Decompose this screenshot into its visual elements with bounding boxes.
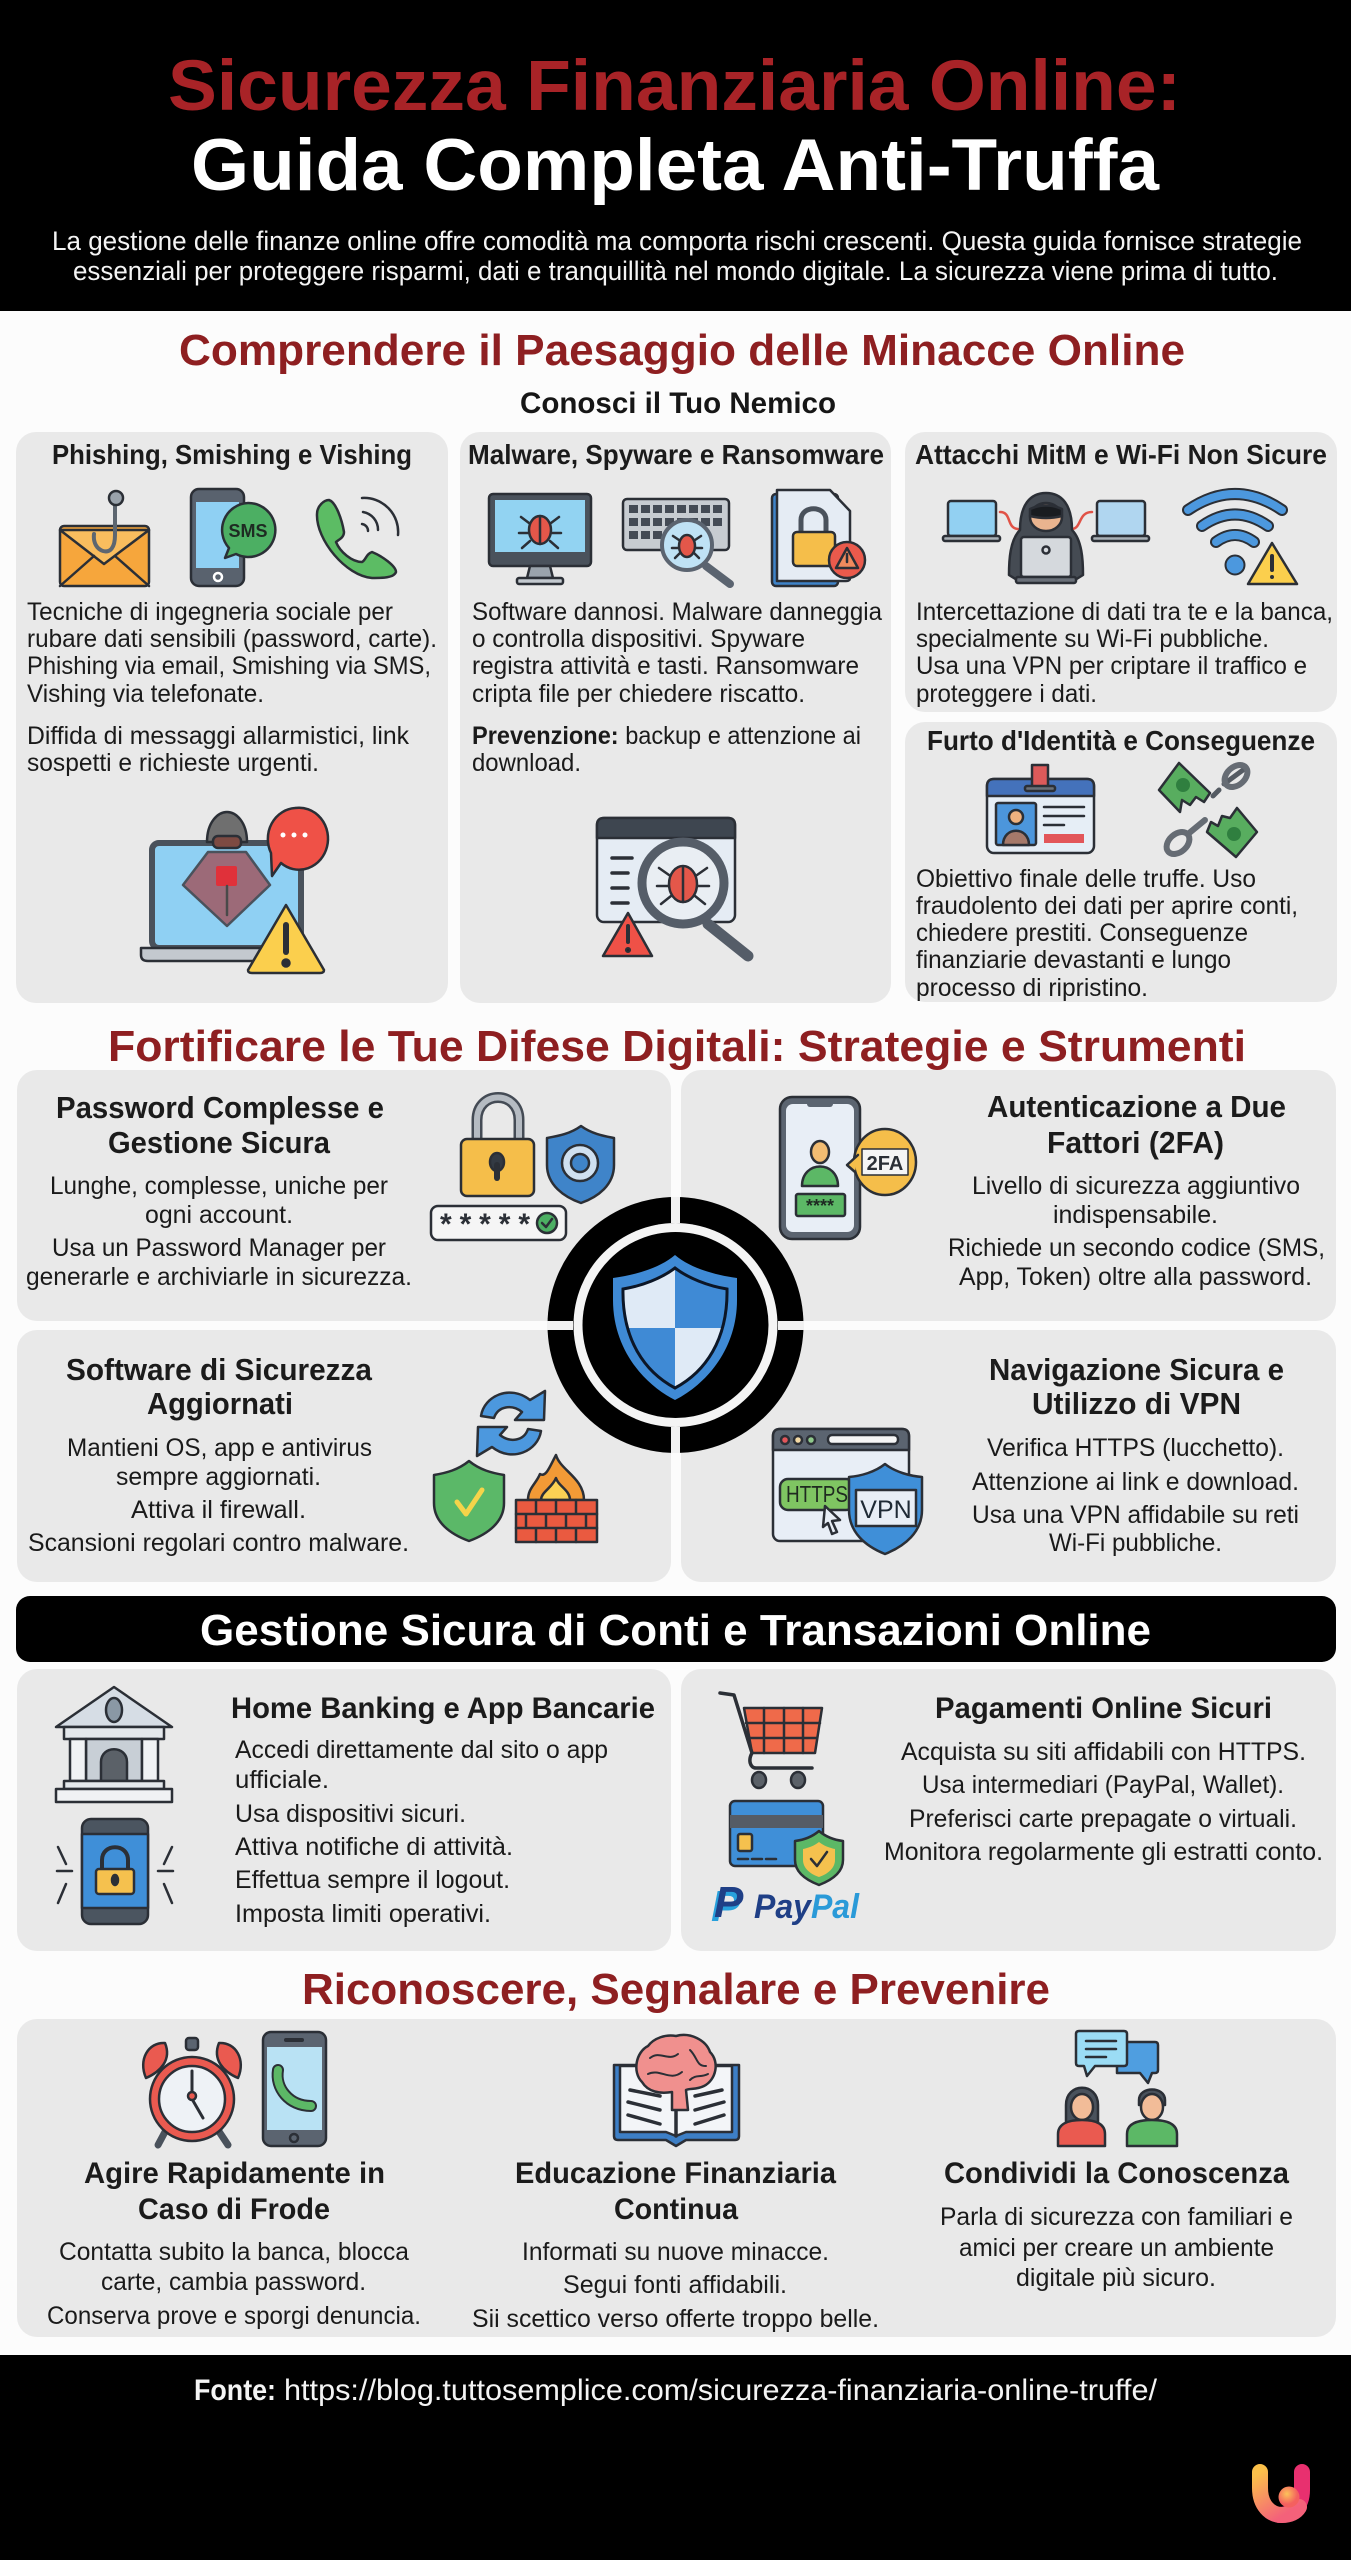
card title: Continua bbox=[614, 2193, 738, 2226]
panel: security software bbox=[17, 1330, 671, 1582]
card text: Conserva prove e sporgi denuncia. bbox=[47, 2302, 421, 2330]
icon: hacker laptop bbox=[141, 808, 328, 973]
text block: rubare dati sensibili (password, carte). bbox=[27, 625, 437, 653]
card text: Imposta limiti operativi. bbox=[235, 1900, 491, 1928]
icon: browser HTTPS and VPN: VPN bbox=[860, 1496, 912, 1524]
icon: padlock and shield bbox=[431, 1098, 614, 1241]
card text: Acquista su siti affidabili con HTTPS. bbox=[901, 1738, 1306, 1766]
card text: carte, cambia password. bbox=[101, 2268, 366, 2296]
logo: PayPal bbox=[711, 1878, 860, 1931]
panel title: Malware, Spyware e Ransomware bbox=[468, 439, 884, 470]
card title: Home Banking e App Bancarie bbox=[231, 1692, 655, 1725]
text block: Tecniche di ingegneria sociale per bbox=[27, 598, 393, 626]
section heading: threats: Comprendere il Paesaggio delle Minacce Online bbox=[179, 326, 1185, 375]
card text bbox=[47, 2238, 421, 2330]
panel title: Furto d'Identità e Conseguenze bbox=[927, 725, 1315, 756]
logo bbox=[1260, 2472, 1302, 2515]
text block: proteggere i dati. bbox=[916, 680, 1097, 708]
icon: browser scan bbox=[597, 818, 748, 956]
text block: Phishing via email, Smishing via SMS, bbox=[27, 652, 431, 680]
footer band bbox=[0, 2355, 1351, 2560]
panel title: Phishing, Smishing e Vishing bbox=[52, 439, 412, 470]
icon: phone call bbox=[317, 498, 398, 578]
card text: Attiva notifiche di attività. bbox=[235, 1833, 513, 1861]
card text: Richiede un secondo codice (SMS, bbox=[948, 1234, 1325, 1262]
source line: Fonte: bbox=[194, 2374, 276, 2407]
icon: phone 2FA: 2FA bbox=[867, 1153, 903, 1175]
text block: Usa una VPN per criptare il traffico e bbox=[916, 652, 1307, 680]
card text: Usa dispositivi sicuri. bbox=[235, 1800, 466, 1828]
text block: Vishing via telefonate. bbox=[27, 680, 264, 708]
card title: Gestione Sicura bbox=[108, 1125, 331, 1160]
logo: PayPal: PayPal bbox=[754, 1888, 860, 1926]
panel title: Attacchi MitM e Wi-Fi Non Sicure bbox=[915, 439, 1327, 470]
icon: padlock and shield: ***** bbox=[440, 1208, 530, 1241]
icon: phone sms bbox=[191, 489, 275, 586]
text block: o controlla dispositivi. Spyware bbox=[472, 625, 805, 653]
text block: fraudolento dei dati per aprire conti, bbox=[916, 892, 1298, 920]
icon: chat and people bbox=[1058, 2031, 1177, 2146]
icon: email hook bbox=[60, 491, 149, 586]
card title bbox=[56, 1090, 384, 1160]
title line 2: Guida Completa Anti-Truffa bbox=[191, 125, 1160, 206]
panel: online payments bbox=[681, 1669, 1336, 1951]
icon: phone 2FA bbox=[780, 1097, 916, 1239]
center shield badge bbox=[547, 1197, 804, 1453]
card title bbox=[84, 2157, 385, 2226]
card title: Condividi la Conoscenza bbox=[944, 2157, 1289, 2190]
text block: finanziarie devastanti e lungo bbox=[916, 946, 1231, 974]
card text: Attenzione ai link e download. bbox=[972, 1468, 1299, 1496]
card text: Usa intermediari (PayPal, Wallet). bbox=[922, 1771, 1284, 1799]
card text: Wi-Fi pubbliche. bbox=[1049, 1529, 1222, 1557]
text block: sospetti e richieste urgenti. bbox=[27, 749, 319, 777]
card text: digitale più sicuro. bbox=[1016, 2264, 1216, 2292]
card text: Contatta subito la banca, blocca bbox=[59, 2238, 409, 2266]
section heading: recognize: Riconoscere, Segnalare e Prevenire bbox=[302, 1965, 1050, 2014]
icon: phone sms: SMS bbox=[228, 521, 268, 541]
panel: MitM bbox=[905, 432, 1337, 712]
card title: Aggiornati bbox=[147, 1386, 293, 1421]
panel: safe navigation bbox=[681, 1330, 1336, 1582]
icon: credit card bbox=[730, 1801, 843, 1885]
section banner: accounts and transactions: Gestione Sicura di Conti e Transazioni Online bbox=[200, 1606, 1151, 1655]
panel: malware bbox=[460, 432, 891, 1003]
panel: passwords bbox=[17, 1070, 671, 1321]
subheading: Conosci il Tuo Nemico bbox=[520, 387, 836, 420]
card text bbox=[940, 2203, 1293, 2292]
header band bbox=[0, 0, 1351, 311]
text block: specialmente su Wi-Fi pubbliche. bbox=[916, 625, 1269, 653]
card text: Parla di sicurezza con familiari e bbox=[940, 2203, 1293, 2231]
card title: Pagamenti Online Sicuri bbox=[935, 1692, 1272, 1725]
card text: Usa un Password Manager per bbox=[52, 1234, 386, 1262]
card text: Verifica HTTPS (lucchetto). bbox=[987, 1434, 1284, 1462]
card text bbox=[948, 1172, 1325, 1291]
logo: PayPal: P bbox=[711, 1882, 741, 1931]
logo: PayPal: P bbox=[714, 1878, 744, 1927]
card title: Caso di Frode bbox=[138, 2193, 330, 2226]
panel: home banking bbox=[17, 1669, 671, 1951]
card text: Segui fonti affidabili. bbox=[563, 2271, 787, 2299]
card text: Mantieni OS, app e antivirus bbox=[67, 1434, 372, 1462]
card text: ogni account. bbox=[145, 1201, 293, 1229]
icon: monitor bug bbox=[489, 494, 591, 584]
card text bbox=[235, 1736, 608, 1928]
card text: amici per creare un ambiente bbox=[959, 2234, 1274, 2262]
panel: recognize report prevent bbox=[17, 2019, 1336, 2337]
text block: cripta file per chiedere riscatto. bbox=[472, 680, 805, 708]
text block: Obiettivo finale delle truffe. Uso bbox=[916, 865, 1256, 893]
card title: Autenticazione a Due bbox=[987, 1089, 1286, 1124]
card text: ufficiale. bbox=[235, 1766, 329, 1794]
icon: sync arrows bbox=[477, 1391, 545, 1456]
icon: locked file bbox=[772, 490, 865, 586]
icon: book and brain bbox=[614, 2035, 739, 2146]
card text bbox=[884, 1738, 1323, 1866]
icon: green shield bbox=[434, 1461, 504, 1541]
text block bbox=[27, 598, 437, 777]
icon: ID card bbox=[987, 765, 1094, 853]
icon: phone 2FA: **** bbox=[806, 1196, 834, 1216]
card text: Attiva il firewall. bbox=[131, 1496, 306, 1524]
text block bbox=[472, 598, 882, 777]
text block bbox=[916, 598, 1333, 708]
text block: download. bbox=[472, 749, 581, 777]
card text: sempre aggiornati. bbox=[116, 1463, 321, 1491]
icon: browser HTTPS and VPN: HTTPS bbox=[786, 1481, 848, 1507]
card text bbox=[472, 2238, 879, 2333]
card text bbox=[26, 1172, 412, 1291]
text block bbox=[916, 865, 1298, 1002]
card title bbox=[989, 1352, 1284, 1421]
card text: Sii scettico verso offerte troppo belle. bbox=[472, 2305, 879, 2333]
icon: keyboard magnifier bbox=[623, 499, 730, 584]
card text bbox=[972, 1434, 1299, 1557]
card title: Navigazione Sicura e bbox=[989, 1352, 1284, 1387]
card title bbox=[987, 1089, 1286, 1160]
text block: registra attività e tasti. Ransomware bbox=[472, 652, 859, 680]
card title: Password Complesse e bbox=[56, 1090, 384, 1125]
text block: chiedere prestiti. Conseguenze bbox=[916, 919, 1248, 947]
card text: Scansioni regolari contro malware. bbox=[28, 1529, 409, 1557]
text block: processo di ripristino. bbox=[916, 974, 1148, 1002]
card text: Lunghe, complesse, uniche per bbox=[50, 1172, 388, 1200]
card text: generarle e archiviarle in sicurezza. bbox=[26, 1263, 412, 1291]
card text: indispensabile. bbox=[1053, 1201, 1218, 1229]
card title: Fattori (2FA) bbox=[1047, 1125, 1224, 1160]
text block: Software dannosi. Malware danneggia bbox=[472, 598, 882, 626]
card title: Software di Sicurezza bbox=[66, 1352, 373, 1387]
panel: phishing bbox=[16, 432, 448, 1003]
card text: App, Token) oltre alla password. bbox=[959, 1263, 1312, 1291]
card text: Livello di sicurezza aggiuntivo bbox=[972, 1172, 1300, 1200]
text block: Diffida di messaggi allarmistici, link bbox=[27, 722, 409, 750]
icon: wifi warning bbox=[1188, 494, 1297, 584]
intro text: La gestione delle finanze online offre comodità ma comporta rischi crescenti. Questa guida fornisce strategie bbox=[52, 226, 1302, 256]
card title bbox=[515, 2157, 836, 2226]
card title: Agire Rapidamente in bbox=[84, 2157, 385, 2190]
icon: alarm clock bbox=[143, 2038, 241, 2145]
text block: Prevenzione: backup e attenzione ai bbox=[472, 722, 861, 750]
card title: Educazione Finanziaria bbox=[515, 2157, 836, 2190]
card title bbox=[66, 1352, 373, 1421]
icon: firewall bbox=[516, 1455, 597, 1542]
icon: cart bbox=[720, 1693, 822, 1788]
text block: Intercettazione di dati tra te e la banca, bbox=[916, 598, 1333, 626]
card text: Monitora regolarmente gli estratti conto. bbox=[884, 1838, 1323, 1866]
panel: 2FA bbox=[681, 1070, 1336, 1321]
card text bbox=[28, 1434, 409, 1557]
card text: Preferisci carte prepagate o virtuali. bbox=[909, 1805, 1297, 1833]
title line 1: Sicurezza Finanziaria Online: bbox=[168, 47, 1181, 126]
card text: Effettua sempre il logout. bbox=[235, 1866, 510, 1894]
icon: laptops and hacker bbox=[943, 493, 1149, 583]
panel: identity theft bbox=[905, 722, 1337, 1002]
intro text: essenziali per proteggere risparmi, dati e tranquillità nel mondo digitale. La sicurezza viene prima di tutto. bbox=[73, 256, 1278, 286]
source line: https://blog.tuttosemplice.com/sicurezza-finanziaria-online-truffe/ bbox=[284, 2374, 1158, 2407]
card text: Accedi direttamente dal sito o app bbox=[235, 1736, 608, 1764]
icon: broken chain and money bbox=[1159, 761, 1257, 858]
intro text bbox=[52, 226, 1302, 286]
section heading: defenses: Fortificare le Tue Difese Digitali: Strategie e Strumenti bbox=[108, 1022, 1246, 1071]
card title: Utilizzo di VPN bbox=[1032, 1386, 1241, 1421]
card text: Informati su nuove minacce. bbox=[522, 2238, 829, 2266]
icon: phone lock bbox=[57, 1819, 173, 1924]
icon: bank bbox=[56, 1687, 172, 1802]
icon: phone bbox=[263, 2032, 326, 2146]
section banner: accounts and transactions bbox=[16, 1596, 1336, 1662]
icon: browser HTTPS and VPN bbox=[773, 1429, 922, 1554]
card text: Usa una VPN affidabile su reti bbox=[972, 1501, 1299, 1529]
icon: shield bbox=[610, 1255, 740, 1400]
